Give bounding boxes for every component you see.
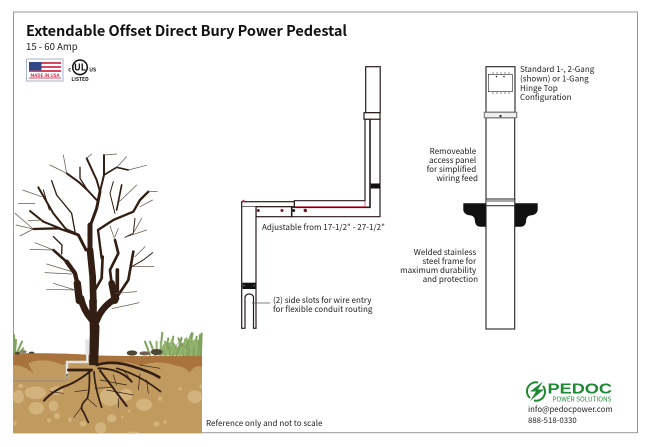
mounting flange bbox=[463, 203, 538, 227]
note: not to scale: Reference only and not to scale bbox=[206, 418, 323, 429]
band bbox=[486, 199, 515, 206]
grass and rocks bbox=[158, 337, 202, 355]
post bbox=[486, 118, 515, 329]
label: access panel: for simplified bbox=[427, 164, 476, 175]
icon: made in USA flag badge: MADE IN USA bbox=[30, 73, 60, 79]
icon: made in USA flag badge bbox=[26, 59, 63, 81]
contact details: info@pedocpower.com bbox=[528, 404, 613, 415]
right pedestal drawing: front view bbox=[463, 67, 538, 329]
logo: PEDOC: PEDOC bbox=[548, 380, 612, 398]
horizontal offset section bbox=[242, 202, 294, 207]
left pedestal drawing: offset extendable bbox=[242, 67, 380, 328]
logo: PEDOC: POWER SOLUTIONS bbox=[552, 394, 612, 404]
top head bbox=[486, 67, 515, 112]
collar bbox=[484, 112, 517, 118]
label: adjustable range: Adjustable from 17-1/2" - 27-1/2" bbox=[262, 222, 385, 233]
label: hinge top: (shown) or 1-Gang bbox=[520, 74, 589, 84]
logo: PEDOC bbox=[527, 380, 612, 404]
contact details: 888-518-0330 bbox=[528, 415, 577, 426]
trunk and roots bbox=[44, 298, 161, 422]
title: Extendable Offset Direct Bury Power Pedestal bbox=[26, 20, 347, 41]
label: stainless frame: and protection bbox=[423, 274, 478, 285]
icon: UL listed mark: UL bbox=[74, 61, 86, 74]
collar bbox=[364, 113, 380, 119]
slider bracket black band bbox=[371, 184, 380, 188]
label: stainless frame: maximum durability bbox=[400, 265, 477, 276]
label: hinge top: Hinge Top bbox=[520, 83, 558, 94]
label: side slots: for flexible conduit routing bbox=[273, 304, 373, 315]
label: side slots: (2) side slots for wire entry bbox=[273, 295, 372, 306]
icon: UL listed mark: US bbox=[89, 66, 96, 74]
icon: UL listed mark bbox=[68, 60, 96, 83]
top riser bbox=[366, 67, 380, 113]
label: hinge top: Standard 1-, 2-Gang bbox=[520, 64, 595, 75]
label: access panel: Removeable bbox=[430, 146, 477, 157]
label: access panel: wiring feed bbox=[436, 173, 478, 184]
vertical leg with slots bbox=[242, 207, 256, 328]
lower riser and horizontal arm bbox=[292, 119, 380, 217]
label: stainless frame: Welded stainless bbox=[414, 247, 476, 258]
label: access panel: access panel bbox=[429, 155, 476, 166]
ground bbox=[13, 298, 202, 434]
tree and ground illustration bbox=[13, 154, 202, 434]
gang plate bbox=[488, 74, 512, 92]
label: stainless frame: steel frame for bbox=[422, 256, 477, 267]
callout leader: side slots bbox=[252, 302, 270, 304]
buried conduit bbox=[13, 379, 65, 382]
tree branches bbox=[15, 154, 157, 301]
icon: UL listed mark: LISTED bbox=[71, 76, 89, 83]
label: hinge top: Configuration bbox=[520, 92, 572, 103]
subtitle: 15 - 60 Amp bbox=[26, 39, 78, 53]
icon: UL listed mark: c bbox=[68, 66, 71, 74]
